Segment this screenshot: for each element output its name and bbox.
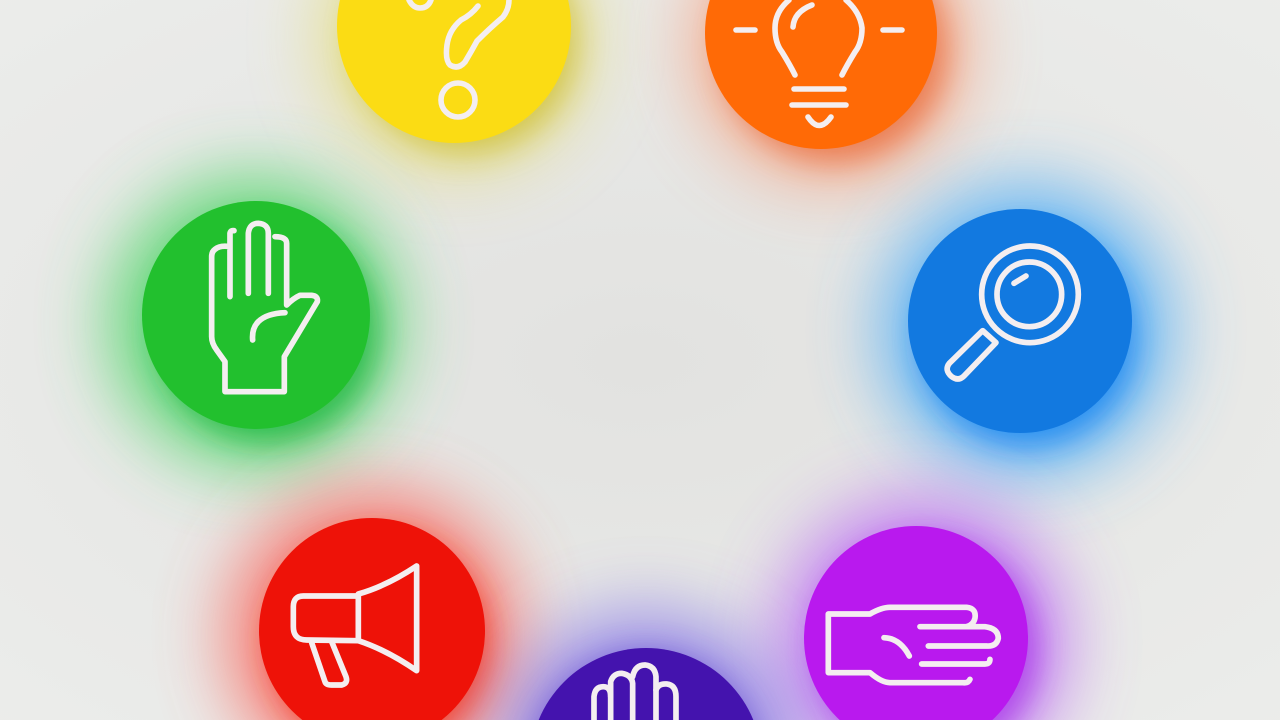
glow: red xyxy=(227,491,517,720)
icon: hand fingers xyxy=(594,665,676,720)
glow: blue xyxy=(881,185,1171,475)
glow: indigo xyxy=(496,612,796,720)
badge: green raised hand xyxy=(142,201,370,429)
badge: red megaphone xyxy=(259,518,485,720)
badge: purple pointing hand xyxy=(804,526,1028,720)
icon: sideways hand xyxy=(828,607,998,683)
glow: green xyxy=(109,177,399,467)
glow: orange xyxy=(692,0,968,182)
badge: indigo hand xyxy=(530,648,762,720)
icon: magnifying glass xyxy=(947,246,1078,379)
badge: blue magnifying glass xyxy=(908,209,1132,433)
badge: yellow question mark xyxy=(337,0,571,143)
glow: purple xyxy=(777,497,1067,720)
icon: question mark xyxy=(409,0,509,117)
icon: light bulb xyxy=(736,0,902,126)
icon: megaphone xyxy=(293,566,417,685)
icon: raised hand xyxy=(212,223,317,392)
glow: yellow xyxy=(321,0,591,171)
badge: orange light bulb xyxy=(705,0,937,149)
